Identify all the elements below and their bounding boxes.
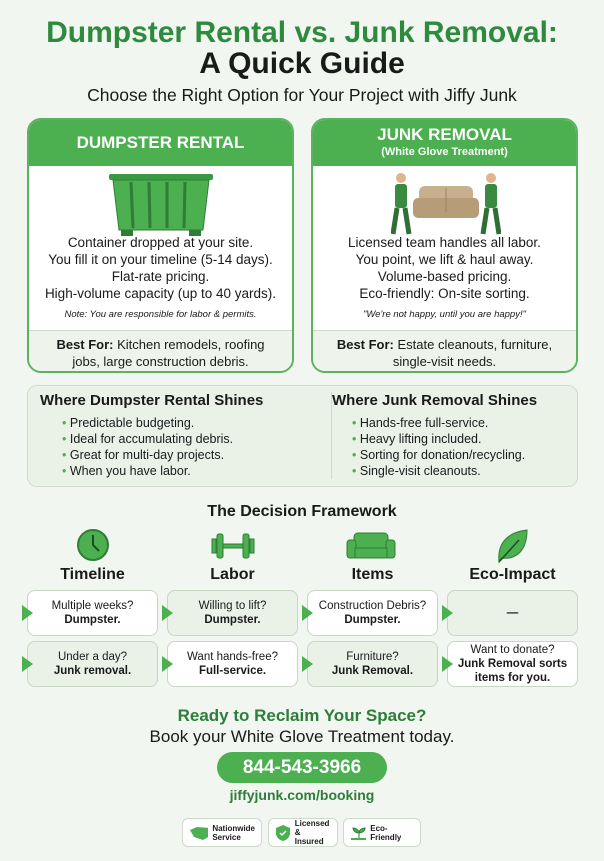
heading <box>313 120 576 166</box>
junk removal shines <box>331 392 576 479</box>
text: Items <box>352 566 393 583</box>
heading: decision framework: The Decision Framework <box>207 503 397 520</box>
icon: dumbbell <box>212 534 254 558</box>
decision grid: Want hands-free? <box>187 651 278 663</box>
icon: dumpster <box>109 174 213 236</box>
best for: Best For: Kitchen remodels, roofing <box>56 337 265 352</box>
decision grid: Under a day? <box>58 651 127 663</box>
junk removal shines: Heavy lifting included. <box>360 432 481 446</box>
subtitle: Choose the Right Option for Your Project with Jiffy Junk <box>87 85 517 105</box>
text: Eco-Impact <box>469 566 556 583</box>
badge: nationwide: Nationwide <box>212 824 255 832</box>
description: High-volume capacity (up to 40 yards). <box>45 286 276 301</box>
description: Eco-friendly: On-site sorting. <box>359 286 530 301</box>
badge: eco <box>343 818 421 847</box>
decision grid: — <box>507 607 518 619</box>
icon: movers with couch <box>391 173 501 234</box>
decision grid: Construction Debris? <box>319 600 426 612</box>
phone pill <box>217 752 387 783</box>
dumpster shines: When you have labor. <box>70 464 191 478</box>
junk removal shines: Single-visit cleanouts. <box>360 464 481 478</box>
url: jiffyjunk.com/booking <box>230 787 374 803</box>
badge: nationwide <box>182 818 262 847</box>
badge: nationwide: Service <box>212 832 241 842</box>
badge: licensed: Licensed <box>295 819 329 828</box>
heading: (White Glove Treatment) <box>381 146 508 158</box>
quote: "We're not happy, until you are happy!" <box>363 309 526 320</box>
description: Volume-based pricing. <box>378 269 511 284</box>
decision grid: Furniture? <box>346 651 399 663</box>
decision grid: Want to donate? <box>471 644 554 656</box>
decision grid: Full-service. <box>199 665 266 677</box>
text: Labor <box>210 566 255 583</box>
labels: Timeline <box>60 566 125 583</box>
call to action <box>150 706 454 746</box>
title <box>46 16 558 80</box>
panel: dumpster rental <box>27 118 294 373</box>
best for <box>29 330 292 371</box>
title: Dumpster Rental vs. Junk Removal: <box>46 16 558 49</box>
description: You fill it on your timeline (5-14 days). <box>48 252 273 267</box>
dumpster shines: Great for multi-day projects. <box>70 448 224 462</box>
dumpster shines: Where Dumpster Rental Shines <box>40 392 263 409</box>
description: You point, we lift & haul away. <box>356 252 533 267</box>
panel: where each shines <box>27 385 578 487</box>
junk removal shines: Where Junk Removal Shines <box>332 392 537 409</box>
badge: licensed: & Insured <box>295 828 324 846</box>
call to action: Ready to Reclaim Your Space? <box>178 706 426 725</box>
icon: couch <box>346 532 396 558</box>
description <box>45 235 276 301</box>
decision grid: Junk Removal sorts items for you. <box>458 658 567 684</box>
decision grid: Dumpster. <box>64 614 121 626</box>
junk removal shines: Sorting for donation/recycling. <box>360 448 525 462</box>
decision grid: Dumpster. <box>204 614 261 626</box>
dumpster shines: Predictable budgeting. <box>70 416 194 430</box>
decision grid: Junk Removal. <box>332 665 413 677</box>
best for: Best For: Estate cleanouts, furniture, <box>337 337 552 352</box>
icon: leaf <box>498 530 528 564</box>
description: Flat-rate pricing. <box>112 269 209 284</box>
heading: JUNK REMOVAL <box>377 125 512 144</box>
best for <box>313 330 576 371</box>
description: Container dropped at your site. <box>68 235 253 250</box>
note: Note: You are responsible for labor & permits. <box>64 309 257 320</box>
best for: single-visit needs. <box>393 354 496 369</box>
description <box>348 235 541 301</box>
decision grid: Multiple weeks? <box>52 600 133 612</box>
badge: eco: Eco-Friendly <box>370 824 401 842</box>
icon: clock <box>77 529 109 561</box>
decision grid: Willing to lift? <box>199 600 266 612</box>
best for: jobs, large construction debris. <box>72 354 249 369</box>
dumpster shines <box>40 392 263 478</box>
heading <box>29 120 292 166</box>
panel: junk removal <box>311 118 578 373</box>
decision grid: Dumpster. <box>344 614 401 626</box>
dumpster shines: Ideal for accumulating debris. <box>70 432 233 446</box>
decision grid: Junk removal. <box>54 665 131 677</box>
description: Licensed team handles all labor. <box>348 235 541 250</box>
heading: DUMPSTER RENTAL <box>77 133 244 152</box>
junk removal shines: Hands-free full-service. <box>360 416 488 430</box>
title: A Quick Guide <box>199 47 405 80</box>
badge: licensed <box>268 818 338 847</box>
call to action: Book your White Glove Treatment today. <box>150 727 454 746</box>
phone pill: 844-543-3966 <box>243 757 361 778</box>
